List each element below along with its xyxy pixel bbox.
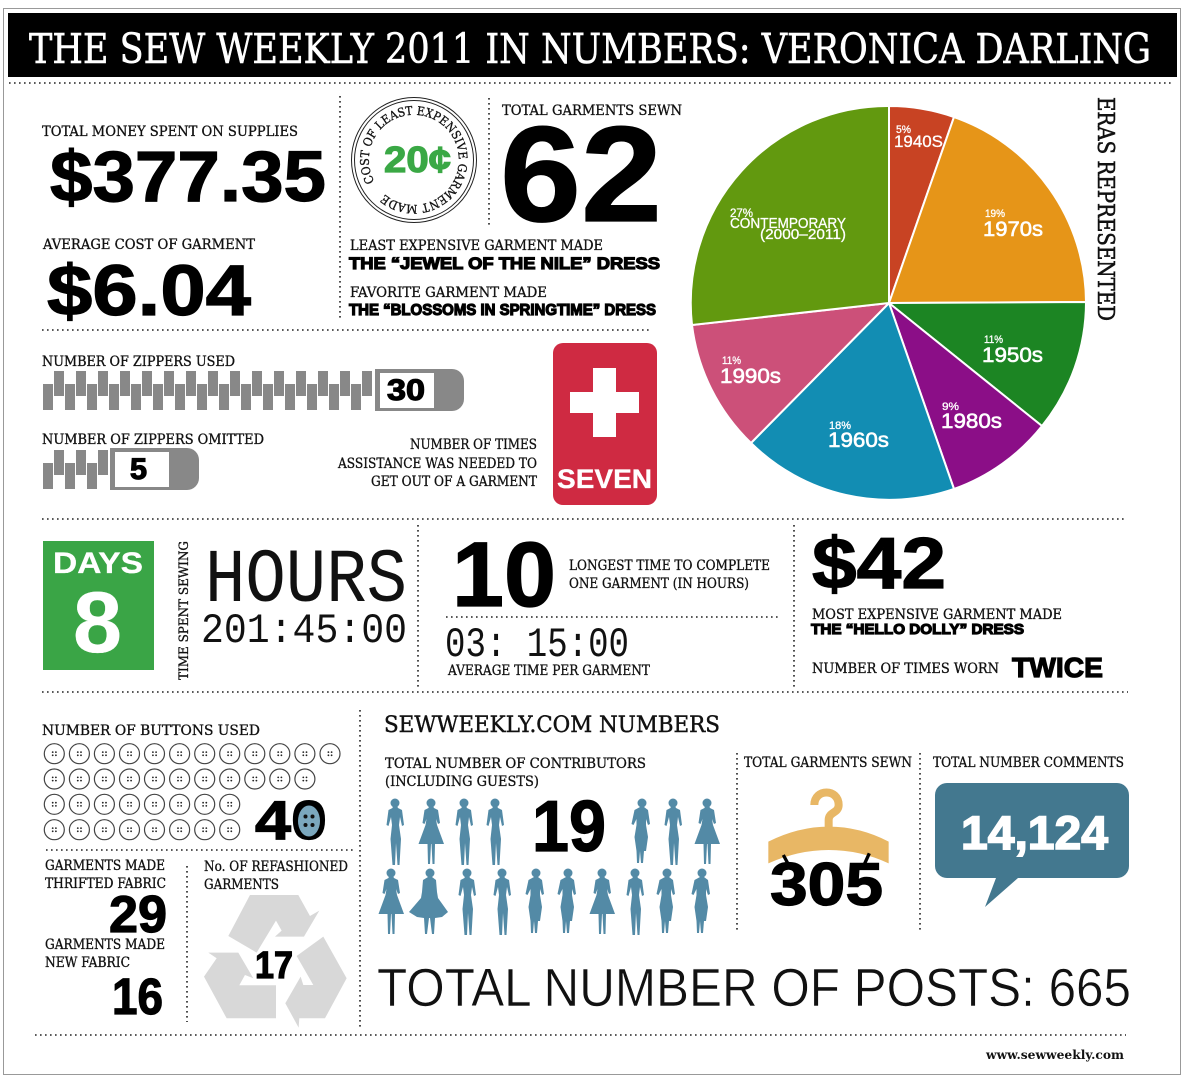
buttons: number of buttons used [42, 723, 340, 840]
stat: new fabric [45, 937, 165, 1025]
stat: longest time 10: ONE GARMENT (IN HOURS) [569, 576, 749, 592]
recycle icon: refashioned garments: 17 [255, 945, 293, 987]
stamp: cost of least expensive garment: 20¢ [384, 139, 451, 180]
footer url: www.sewweekly.com [985, 1048, 1124, 1062]
digital readout: average time per garment: 03: 15:00 [445, 621, 629, 669]
pie chart: eras represented: 1960s [828, 429, 889, 452]
recycle icon: refashioned garments: GARMENTS [204, 877, 279, 893]
stat: new fabric: NEW FABRIC [45, 955, 130, 971]
zipper: zippers omitted 5: 5 [130, 453, 147, 486]
stat: total money spent: TOTAL MONEY SPENT ON SUPPLIES [42, 124, 298, 140]
text: least expensive garment: LEAST EXPENSIVE GARMENT MADE [350, 238, 603, 254]
zipper: zippers used 30 [42, 354, 464, 411]
stat: thrifted fabric [45, 858, 167, 944]
pie chart: eras represented: 27% [730, 206, 753, 220]
stat: longest time 10 [452, 524, 770, 626]
stat: contributors with silhouettes: 19 [532, 787, 606, 867]
stat: most expensive garment: NUMBER OF TIMES WORN [812, 661, 999, 677]
text: favorite garment: FAVORITE GARMENT MADE [350, 285, 547, 301]
card: 8 days: 8 [73, 575, 122, 671]
recycle icon: refashioned garments [204, 859, 348, 1028]
stat: longest time 10: 10 [452, 524, 556, 626]
pie chart: eras represented: 1950s [982, 344, 1043, 367]
digital readout: hours: 201:45:00 [201, 607, 407, 655]
card: 8 days: DAYS [53, 547, 143, 580]
stat: new fabric: GARMENTS MADE [45, 937, 165, 953]
text: assistance needed [337, 437, 538, 490]
stat: average cost of garment [42, 237, 256, 331]
stat: contributors with silhouettes: (INCLUDING GUESTS) [385, 774, 539, 790]
speech bubble: total comments: TOTAL NUMBER COMMENTS [933, 755, 1124, 771]
pie chart: eras represented [691, 106, 1086, 500]
stat: contributors with silhouettes: TOTAL NUMBER OF CONTRIBUTORS [385, 756, 646, 772]
card: 8 days [43, 541, 154, 671]
stamp: cost of least expensive garment: COST OF LEAST EXPENSIVE GARMENT MADE [360, 106, 468, 214]
stat: most expensive garment [811, 524, 1103, 683]
digital readout: hours [201, 538, 407, 655]
text: favorite garment [349, 285, 656, 319]
stat: most expensive garment: $42 [812, 524, 946, 604]
stat: thrifted fabric: THRIFTED FABRIC [45, 876, 166, 892]
pie chart: eras represented: 11% [722, 355, 741, 367]
stat: thrifted fabric: 29 [109, 886, 167, 944]
pie chart: eras represented: 1970s [983, 218, 1043, 241]
stat: total garments sewn hanger 305: 305 [770, 851, 883, 918]
heading: sewweekly.com numbers: SEWWEEKLY.COM NUMBERS [384, 713, 720, 738]
text: least expensive garment [349, 238, 660, 273]
text: favorite garment: THE “BLOSSOMS IN SPRINGTIME” DRESS [349, 302, 656, 319]
stat: total garments sewn hanger 305 [744, 755, 912, 918]
speech bubble: total comments [933, 755, 1129, 907]
speech bubble: total comments: 14,124 [961, 806, 1108, 859]
zipper: zippers used 30: NUMBER OF ZIPPERS USED [42, 354, 235, 370]
stat: most expensive garment: MOST EXPENSIVE GARMENT MADE [812, 607, 1062, 623]
text: assistance needed: GET OUT OF A GARMENT [371, 474, 538, 490]
digital readout: hours: HOURS [205, 538, 407, 624]
pie chart: eras represented: 5% [896, 124, 911, 136]
stat: new fabric: 16 [112, 968, 163, 1025]
stat: total money spent: $377.35 [50, 138, 326, 217]
buttons: number of buttons used: NUMBER OF BUTTONS USED [42, 723, 260, 739]
pie chart: eras represented: 1980s [941, 410, 1002, 433]
text: least expensive garment: THE “JEWEL OF THE NILE” DRESS [349, 254, 660, 273]
zipper: zippers omitted 5: NUMBER OF ZIPPERS OMITTED [42, 432, 264, 448]
pie chart: eras represented: 9% [942, 401, 959, 413]
text: assistance needed: ASSISTANCE WAS NEEDED TO [337, 456, 537, 472]
stat: longest time 10: LONGEST TIME TO COMPLETE [569, 558, 770, 574]
text: assistance needed: NUMBER OF TIMES [410, 437, 537, 453]
stat: average cost of garment: $6.04 [47, 252, 252, 331]
digital readout: average time per garment: AVERAGE TIME PER GARMENT [447, 663, 651, 679]
stat: total garments sewn 62: TOTAL GARMENTS SEWN [502, 103, 682, 119]
stat: most expensive garment: TWICE [1012, 652, 1103, 683]
stat: total garments sewn 62: 62 [500, 98, 662, 250]
pie chart: eras represented: 11% [984, 334, 1003, 346]
zipper: zippers used 30: 30 [387, 374, 425, 407]
zipper: zippers omitted 5 [42, 432, 264, 490]
label: time spent sewing: TIME SPENT SEWING [177, 541, 192, 680]
pie chart: eras represented: CONTEMPORARY [730, 215, 846, 232]
stat: most expensive garment: THE “HELLO DOLLY” DRESS [811, 621, 1024, 638]
recycle icon: refashioned garments: No. OF REFASHIONED [204, 859, 348, 875]
pie chart: eras represented: 1990s [720, 365, 781, 388]
pie chart: eras represented: 18% [829, 420, 851, 432]
stat: contributors with silhouettes [378, 756, 720, 935]
stat: average cost of garment: AVERAGE COST OF GARMENT [42, 237, 256, 253]
pie chart: eras represented: 19% [985, 208, 1005, 220]
pie chart: eras represented: (2000–2011) [760, 226, 846, 243]
stat: thrifted fabric: GARMENTS MADE [45, 858, 165, 874]
card: red cross seven [553, 343, 657, 505]
total number of posts: TOTAL NUMBER OF POSTS: 665 [377, 958, 1131, 1018]
stat: total garments sewn hanger 305: TOTAL GARMENTS SEWN [744, 755, 912, 771]
heading: eras represented: ERAS REPRESENTED [1092, 97, 1118, 321]
number: 40 with button zero: 40 [255, 789, 327, 851]
pie chart: eras represented: 1940S [894, 132, 943, 151]
card: red cross seven: SEVEN [557, 464, 652, 494]
